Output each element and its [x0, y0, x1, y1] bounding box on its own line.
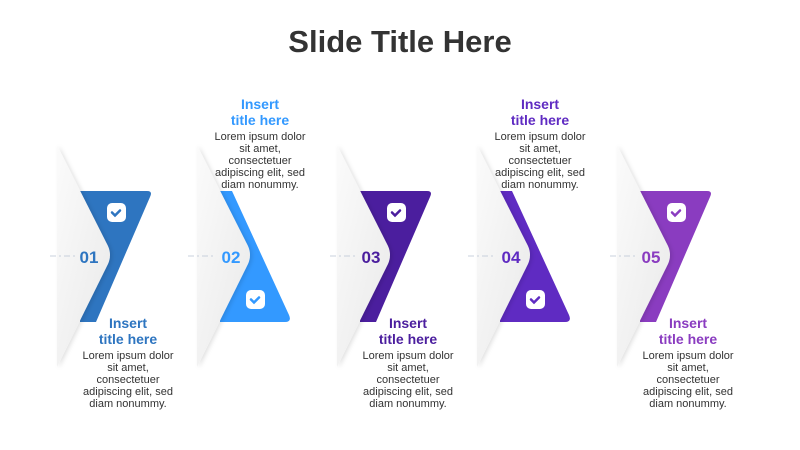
- text block 2: title here: [231, 112, 289, 128]
- step 4: [468, 145, 570, 367]
- text block 4: adipiscing elit, sed: [495, 167, 585, 179]
- text block 2: sit amet,: [239, 143, 281, 155]
- text block 4: Insert: [521, 96, 559, 112]
- text block 3: adipiscing elit, sed: [363, 386, 453, 398]
- text block 5: Insert: [669, 315, 707, 331]
- text block 1: Insert: [109, 315, 147, 331]
- step 2: [188, 145, 290, 367]
- text block 5: [642, 315, 734, 410]
- text block 1: consectetuer: [96, 374, 159, 386]
- text block 1: sit amet,: [107, 362, 149, 374]
- text block 5: title here: [659, 331, 717, 347]
- text block 3: Lorem ipsum dolor: [362, 350, 454, 362]
- text block 4: consectetuer: [508, 155, 571, 167]
- text block 2: diam nonummy.: [221, 179, 299, 191]
- text block 4: diam nonummy.: [501, 179, 579, 191]
- text block 2: Insert: [241, 96, 279, 112]
- text block 1: diam nonummy.: [89, 398, 167, 410]
- text block 4: title here: [511, 112, 569, 128]
- title: Slide Title Here: [288, 24, 512, 59]
- text block 2: [214, 96, 306, 191]
- text block 4: sit amet,: [519, 143, 561, 155]
- step 5: 05: [642, 248, 660, 267]
- text block 1: title here: [99, 331, 157, 347]
- text block 5: adipiscing elit, sed: [643, 386, 733, 398]
- step 1: 01: [80, 248, 98, 267]
- text block 3: Insert: [389, 315, 427, 331]
- text block 2: adipiscing elit, sed: [215, 167, 305, 179]
- step 2: 02: [222, 248, 240, 267]
- text block 1: adipiscing elit, sed: [83, 386, 173, 398]
- text block 3: title here: [379, 331, 437, 347]
- text block 3: [362, 315, 454, 410]
- text block 1: [82, 315, 174, 410]
- text block 5: diam nonummy.: [649, 398, 727, 410]
- step 1: [50, 145, 151, 367]
- step 3: 03: [362, 248, 380, 267]
- step 5: [610, 145, 711, 367]
- text block 1: Lorem ipsum dolor: [82, 350, 174, 362]
- text block 2: consectetuer: [228, 155, 291, 167]
- text block 5: sit amet,: [667, 362, 709, 374]
- text block 3: diam nonummy.: [369, 398, 447, 410]
- text block 2: Lorem ipsum dolor: [214, 131, 306, 143]
- step 4: 04: [502, 248, 521, 267]
- text block 3: consectetuer: [376, 374, 439, 386]
- text block 5: Lorem ipsum dolor: [642, 350, 734, 362]
- text block 5: consectetuer: [656, 374, 719, 386]
- text block 3: sit amet,: [387, 362, 429, 374]
- step 3: [330, 145, 431, 367]
- text block 4: [494, 96, 586, 191]
- text block 4: Lorem ipsum dolor: [494, 131, 586, 143]
